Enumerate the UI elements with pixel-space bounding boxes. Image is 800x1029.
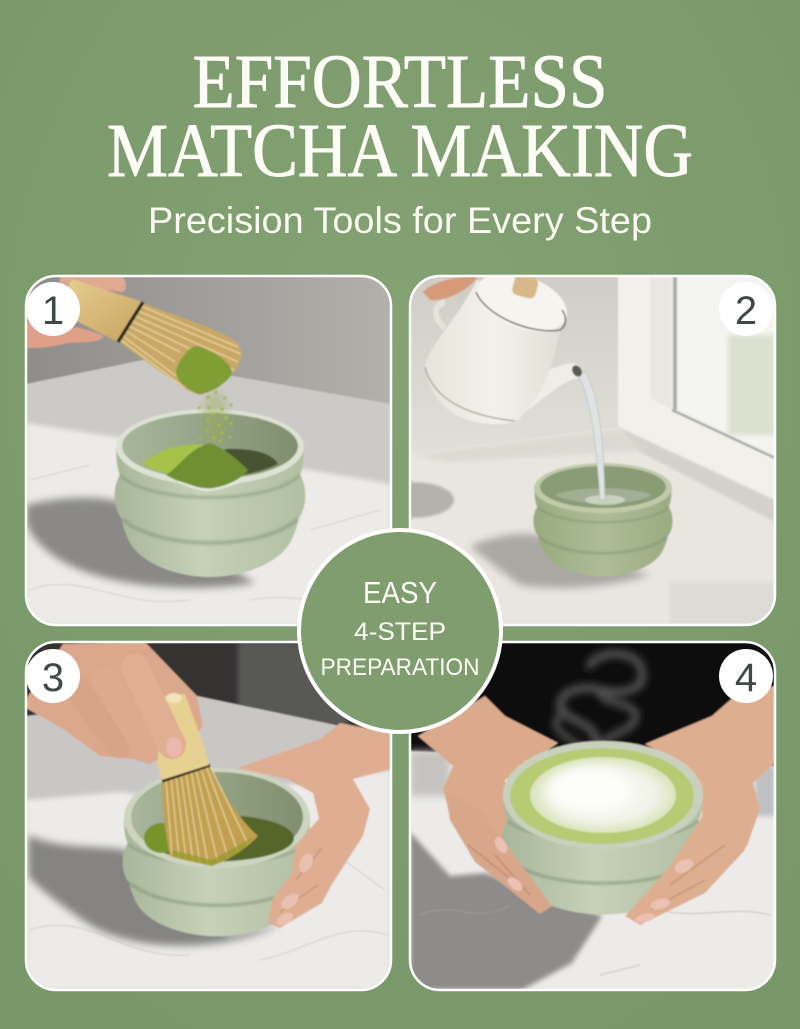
step 1 number badge — [26, 282, 80, 336]
marble veins — [420, 905, 770, 975]
left hand — [418, 696, 558, 880]
title: EFFORTLESS — [192, 40, 608, 124]
matcha liquid left — [142, 444, 204, 474]
handle opening — [166, 693, 182, 703]
bowl rim — [503, 741, 703, 849]
panel: step 4 serve — [410, 642, 775, 990]
title second line: MATCHA MAKING — [107, 109, 693, 193]
whisk tines — [120, 303, 242, 395]
bowl body — [123, 818, 311, 936]
kettle base line — [425, 367, 515, 421]
fingernails — [492, 835, 696, 924]
steam — [556, 654, 642, 745]
step 3 number badge — [26, 649, 80, 703]
sill line — [672, 410, 775, 458]
whisk tips — [172, 836, 255, 866]
kettle lid — [469, 261, 575, 343]
kettle knob — [511, 273, 539, 300]
fingernail — [166, 737, 182, 757]
right hand palm behind bowl — [237, 723, 391, 928]
hand — [26, 322, 103, 348]
lower right shade — [670, 582, 775, 625]
badge line 1: EASY — [363, 575, 437, 610]
counter — [411, 450, 774, 624]
marble veins — [30, 760, 388, 960]
kettle spout — [515, 363, 581, 412]
kettle body — [425, 280, 565, 424]
cast shadow — [410, 832, 602, 990]
falling powder — [198, 390, 233, 443]
hand on kettle — [423, 276, 478, 300]
dark background — [26, 642, 391, 737]
whisk handle — [67, 279, 142, 342]
sweater highlight — [238, 642, 348, 727]
powder in whisk — [176, 346, 232, 394]
spout notch — [178, 481, 240, 490]
bowl body — [115, 447, 305, 577]
right hand over bowl — [268, 815, 350, 928]
panel border 1 — [26, 276, 391, 625]
sill shadow — [618, 427, 775, 522]
panel border 3 — [26, 642, 391, 990]
marble veins — [30, 465, 390, 602]
marble — [410, 751, 775, 990]
left fingers — [445, 790, 552, 914]
window glass — [677, 276, 775, 455]
step 4 number badge: 4 — [735, 656, 757, 700]
bowl interior — [540, 466, 666, 508]
wall — [26, 276, 391, 406]
matcha powder pile — [166, 443, 248, 488]
left hand back — [26, 642, 203, 764]
panel border 4 — [410, 642, 775, 990]
bowl body — [502, 795, 704, 915]
left shadow — [411, 481, 455, 520]
matcha liquid — [146, 815, 294, 861]
bowl shadow — [28, 835, 280, 946]
fingers above whisk — [60, 276, 126, 292]
spout opening — [570, 364, 584, 378]
step 1 number badge: 1 — [42, 289, 64, 333]
whisk tine lines — [121, 306, 241, 388]
matcha liquid dark right — [225, 449, 278, 478]
sunlit marble — [26, 770, 391, 990]
bowl body — [533, 488, 673, 576]
subtitle: Precision Tools for Every Step — [148, 200, 652, 241]
dark background — [410, 642, 775, 772]
water stream — [578, 372, 605, 500]
bowl shadow — [470, 534, 650, 588]
badge line 3: PREPARATION — [320, 654, 480, 681]
step 3 number badge: 3 — [42, 656, 64, 700]
whisk handle — [157, 694, 209, 780]
badge line 2: 4-STEP — [354, 618, 446, 646]
whisk band — [162, 765, 210, 781]
step 2 number badge — [719, 282, 773, 336]
panel border 2 — [410, 276, 775, 625]
bowl interior — [122, 413, 298, 479]
whisk band — [118, 302, 143, 342]
bubbles — [585, 495, 625, 505]
counter — [26, 696, 391, 990]
bowl rim — [534, 463, 672, 513]
kettle handle — [436, 302, 445, 328]
matcha surface — [510, 748, 694, 844]
right hand creases — [280, 848, 322, 912]
liquid bright foam — [144, 823, 180, 853]
window edge line — [673, 276, 677, 410]
bowl shadow — [26, 498, 255, 588]
right finger creases — [650, 845, 725, 910]
right hand — [645, 686, 775, 905]
sunlit marble — [26, 423, 391, 625]
right fingernails — [275, 851, 316, 928]
left finger creases — [468, 845, 530, 895]
marble top right shade — [755, 766, 775, 816]
step 4 number badge — [719, 649, 773, 703]
right fingers — [625, 790, 745, 925]
bowl rim — [116, 409, 304, 485]
center badge — [299, 530, 501, 732]
water in bowl — [555, 488, 652, 503]
marble top left shade — [410, 751, 450, 796]
foam peak — [548, 768, 632, 812]
fingers — [78, 668, 172, 748]
counter — [26, 360, 391, 625]
window frame — [618, 276, 775, 510]
panel: step 2 pour water — [411, 277, 774, 624]
window reveal — [652, 278, 670, 406]
step 2 number badge: 2 — [735, 289, 757, 333]
wall — [411, 277, 619, 454]
counter shade band — [424, 430, 636, 461]
bowl interior — [131, 772, 303, 862]
bowl rim — [124, 768, 310, 868]
panel: step 1 add matcha powder — [26, 276, 391, 625]
view through window — [728, 335, 775, 435]
milk foam — [530, 757, 676, 833]
lid ring — [476, 292, 566, 331]
whisk tines — [162, 765, 258, 866]
panel: step 3 whisk — [26, 642, 391, 990]
whisk tine lines — [166, 766, 248, 864]
falling powder haze — [202, 392, 228, 444]
